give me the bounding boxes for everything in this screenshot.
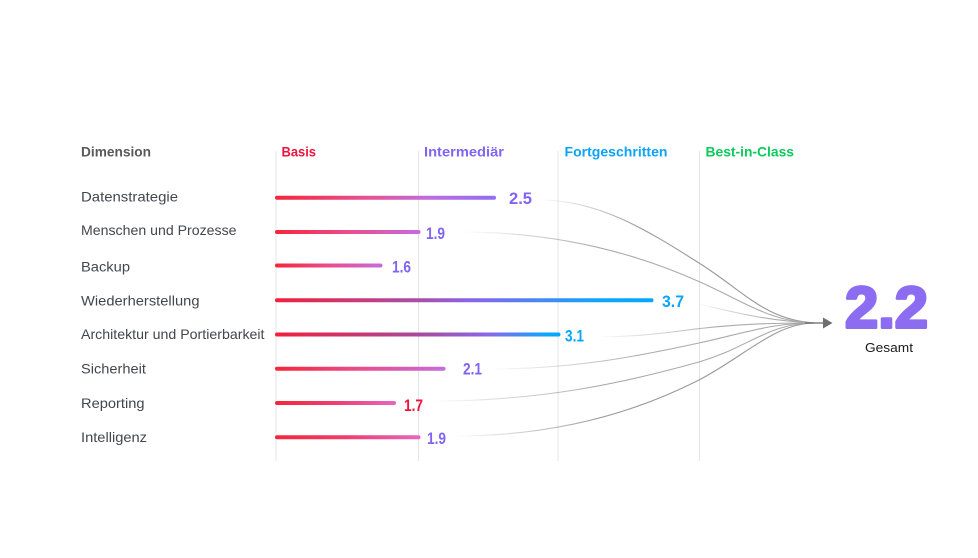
bar values: 1.9 xyxy=(426,225,445,243)
column headers: Fortgeschritten xyxy=(564,144,668,160)
dimension labels: Sicherheit xyxy=(81,360,146,376)
column headers: Intermediär xyxy=(424,144,505,160)
dimension labels: Architektur und Portierbarkeit xyxy=(81,326,265,342)
bar values: 3.1 xyxy=(565,328,584,346)
dimension labels: Datenstrategie xyxy=(81,188,178,204)
bar values: 1.9 xyxy=(427,430,446,448)
bar values: 3.7 xyxy=(662,293,684,311)
dimension labels: Wiederherstellung xyxy=(81,292,200,308)
bar values: 2.5 xyxy=(509,190,532,208)
column headers: Best-in-Class xyxy=(706,144,794,160)
column headers xyxy=(81,144,794,160)
bar values xyxy=(392,190,684,448)
dimension labels: Reporting xyxy=(81,395,144,411)
bars xyxy=(277,198,652,437)
column headers: Dimension xyxy=(81,144,151,160)
arrow xyxy=(805,318,832,328)
dimension labels: Menschen und Prozesse xyxy=(81,222,237,238)
bar values: 2.1 xyxy=(463,360,482,378)
bar values: 1.6 xyxy=(392,258,411,276)
overall score: Gesamt xyxy=(865,340,913,355)
dimension labels xyxy=(81,188,265,445)
bar values: 1.7 xyxy=(404,397,423,415)
dimension labels: Backup xyxy=(81,258,130,274)
overall score: 2.2 xyxy=(845,276,928,340)
column headers: Basis xyxy=(282,144,316,160)
connector curves xyxy=(432,200,815,436)
dimension labels: Intelligenz xyxy=(81,429,147,445)
